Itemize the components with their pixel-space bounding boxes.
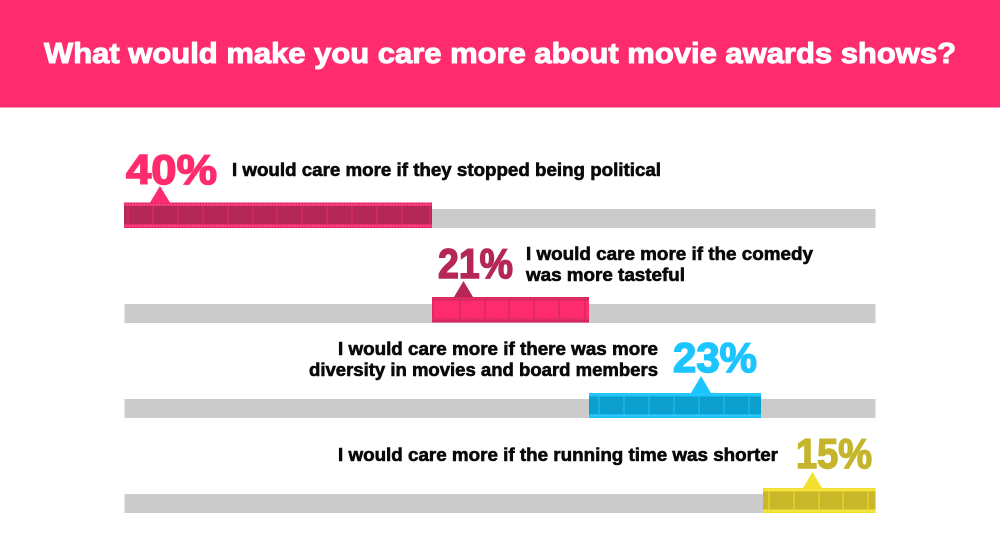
label 3: I would care more if there was more (338, 339, 658, 359)
label 2 (525, 244, 813, 285)
panel: row 3, 23% diversity (124, 334, 876, 418)
label 2: was more tasteful (525, 265, 685, 285)
pointer 4 (803, 472, 822, 488)
film bar 1 (124, 202, 432, 228)
track 1 (124, 209, 876, 228)
header banner (0, 0, 1000, 108)
panel: row 1, 40% political (124, 146, 876, 228)
value 23%: 23% (673, 334, 757, 381)
panel: row 2, 21% comedy (124, 240, 876, 323)
value 40%: 40% (126, 146, 217, 193)
label 2: I would care more if the comedy (526, 244, 813, 264)
label 3: diversity in movies and board members (309, 360, 658, 380)
label 3 (309, 339, 658, 380)
film bar 3 (589, 393, 761, 418)
film bar 4 (763, 488, 876, 513)
pointer 1 (150, 186, 170, 202)
label 1: I would care more if they stopped being political (232, 160, 661, 180)
title: What would make you care more about movie awards shows? (44, 38, 956, 70)
value 21%: 21% (438, 240, 513, 287)
track 3 (124, 399, 876, 418)
label 4: I would care more if the running time was shorter (338, 445, 778, 465)
pointer 3 (691, 376, 711, 393)
pointer 2 (454, 281, 473, 297)
track 2 (124, 304, 876, 323)
value 15%: 15% (796, 430, 872, 477)
track 4 (124, 494, 876, 513)
film bar 2 (432, 297, 589, 322)
panel: row 4, 15% running time (124, 430, 876, 513)
